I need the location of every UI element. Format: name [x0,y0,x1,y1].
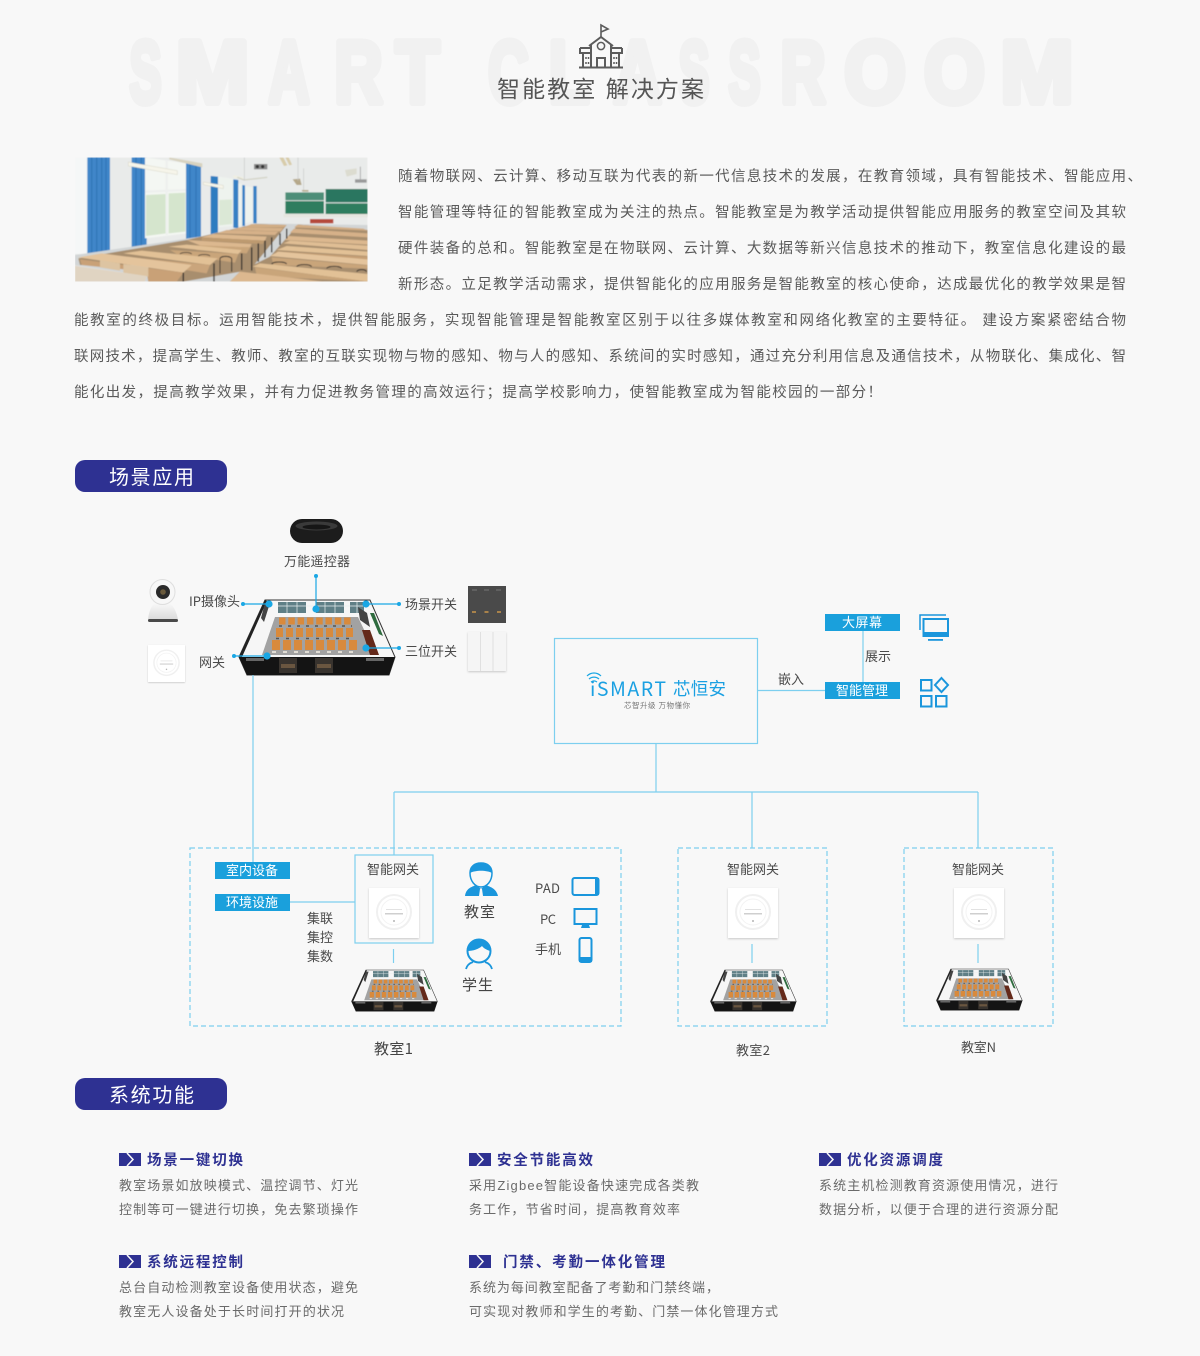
background watermark: SMART CLASSROOM: S [728,24,761,122]
label: 学生: 学生 [462,974,493,995]
title: 智能教室 解决方案 [497,76,704,102]
feature: 优化资源调度: 系统主机检测教育资源使用情况，进行 [819,1178,1058,1193]
tag: 环境设施 [215,892,290,911]
feature: 系统远程控制: 教室无人设备处于长时间打开的状况 [119,1304,344,1319]
heading: 场景应用 [75,460,227,492]
label: 教室2: 教室2 [736,1040,770,1059]
label: 三位开关: 三位开关 [405,641,457,660]
icon: IP camera [148,580,178,622]
label: 网关: 网关 [199,652,225,671]
feature: 系统远程控制 [119,1253,358,1319]
logo text: iSMART [590,673,666,702]
tag: 室内设备: 室内设备 [226,860,278,879]
tag: 大屏幕 [825,612,900,631]
feature: 场景一键切换 [119,1151,358,1217]
label: 场景开关: 场景开关 [405,594,457,613]
panel: 教室2 [678,848,827,1026]
connector: 嵌入 [757,669,825,690]
label: IP摄像头: IP摄像头 [189,591,240,610]
background watermark: SMART CLASSROOM: C [488,23,529,122]
feature: 门禁、考勤一体化管理 [469,1253,778,1319]
icon: school building [579,25,623,68]
connector: 展示: 展示 [865,646,891,665]
text: 集联 集控 集数: 集联 [307,908,333,927]
icon: phone [579,938,592,962]
icon: wifi logo mark [587,673,601,682]
background watermark: SMART CLASSROOM: M [1000,22,1074,122]
connector network [253,675,978,902]
text: 集联 集控 集数: 集控 [307,927,333,946]
intro paragraph: 硬件装备的总和。智能教室是在物联网、云计算、大数据等新兴信息技术的推动下，教室信息化建设的最 [398,239,1126,257]
icon: monitor [574,909,596,928]
background watermark: SMART CLASSROOM: M [176,22,249,122]
iSMART box [554,638,758,744]
background watermark: SMART CLASSROOM: O [844,23,906,121]
logo slogan: 芯智升级 万物懂你 [624,700,690,710]
device labels: PC [540,909,556,928]
feature: 优化资源调度 [819,1151,1058,1217]
heading: 场景应用: 场景应用 [109,466,194,489]
feature: 安全节能高效: 采用Zigbee智能设备快速完成各类教 [469,1178,699,1193]
logo text: 芯恒安 [673,676,726,701]
background watermark: SMART CLASSROOM: O [924,23,985,122]
label: 教室N: 教室N [961,1037,996,1056]
classroom model 1 [352,970,437,1011]
heading: 系统功能 [75,1078,227,1110]
background watermark: SMART CLASSROOM: A [613,23,662,122]
icon: tablet [572,878,599,895]
intro paragraph: 联网技术，提高学生、教师、教室的互联实现物与物的感知、物与人的感知、系统间的实时感知，通过充分利用信息及通信技术，从物联化、集成化、智 [74,348,1126,365]
device labels: PAD [535,878,560,897]
connector: 嵌入: 嵌入 [778,669,804,688]
tag: 环境设施: 环境设施 [226,892,278,911]
tag: 智能管理 [825,680,900,699]
background watermark: SMART CLASSROOM: L [549,23,589,122]
feature: 门禁、考勤一体化管理: 系统为每间教室配备了考勤和门禁终端， [469,1280,719,1295]
background watermark: SMART CLASSROOM: T [395,24,440,122]
feature: 优化资源调度: 数据分析，以便于合理的进行资源分配 [819,1202,1058,1217]
connector: 展示 [863,631,891,682]
intro paragraph: 随着物联网、云计算、移动互联为代表的新一代信息技术的发展，在教育领域，具有智能技术、智能应用、 [398,167,1142,185]
connector dots [232,574,401,660]
feature: 安全节能高效: 安全节能高效 [497,1151,594,1169]
feature: 系统远程控制: 总台自动检测教室设备使用状态，避免 [119,1280,358,1295]
feature: 场景一键切换: 场景一键切换 [147,1151,244,1169]
feature: 场景一键切换: 教室场景如放映模式、温控调节、灯光 [119,1178,358,1193]
tag: 室内设备 [215,860,290,879]
background watermark: SMART CLASSROOM: S [129,24,162,122]
logo text [590,673,726,702]
desk legs and chairs [180,229,367,282]
icon: universal remote [290,519,343,543]
icon: teacher [465,863,498,896]
tag: 大屏幕: 大屏幕 [842,612,882,631]
icon: student [466,939,492,969]
background watermark: SMART CLASSROOM: A [268,23,310,121]
gateway box [355,855,433,943]
text: 集联 集控 集数: 集数 [307,946,333,965]
background watermark: SMART CLASSROOM: S [678,23,710,121]
background watermark: SMART CLASSROOM: R [334,23,383,122]
icon: app grid [921,678,948,706]
left desk rows [75,224,287,282]
label: 教室1: 教室1 [374,1038,413,1059]
intro paragraph: 能化出发，提高教学效果，并有力促进教务管理的高效运行；提高学校影响力，使智能教室成为智能校园的一部分！ [74,384,882,401]
feature: 门禁、考勤一体化管理: 门禁、考勤一体化管理 [503,1253,666,1271]
icon: screens [920,615,949,641]
gateway box: 智能网关 [367,859,419,878]
feature: 门禁、考勤一体化管理: 可实现对教师和学生的考勤、门禁一体化管理方式 [469,1304,778,1319]
icon: dark scene switch [468,586,506,623]
panel: 教室N [904,848,1053,1026]
background watermark: SMART CLASSROOM: R [780,24,826,122]
intro paragraph: 新形态。立足教学活动需求，提供智能化的应用服务是智能教室的核心使命，达成最优化的教学效果是智 [398,275,1126,293]
device labels [535,878,561,958]
background watermark: SMART CLASSROOM [129,22,1074,122]
intro paragraph [74,167,1142,401]
photo: classroom [75,157,368,282]
icon: gateway panel [148,645,185,682]
label: 万能遥控器: 万能遥控器 [284,551,350,570]
heading: 系统功能: 系统功能 [109,1084,194,1107]
panel: 教室N: 智能网关 [952,859,1004,878]
classroom 3D model [239,600,395,675]
feature: 安全节能高效: 务工作，节省时间，提高教育效率 [469,1202,680,1217]
intro paragraph: 能教室的终极目标。运用智能技术，提供智能服务，实现智能管理是智能教室区别于以往多媒体教室和网络化教室的主要特征。 建设方案紧密结合物 [74,311,1126,329]
icon: white three-way switch [468,632,506,671]
feature: 优化资源调度: 优化资源调度 [847,1151,944,1169]
text: 集联 集控 集数 [307,908,333,965]
label: 教室: 教室 [464,901,495,922]
tag: 智能管理: 智能管理 [836,680,888,699]
feature: 系统远程控制: 系统远程控制 [147,1253,243,1271]
panel: 教室1 [190,848,621,1026]
right desk rows [230,225,368,282]
panel: 教室2: 智能网关 [727,859,779,878]
feature: 场景一键切换: 控制等可一键进行切换，免去繁琐操作 [119,1202,358,1217]
diagram: classroom device layout [148,519,506,682]
feature: 安全节能高效 [469,1151,699,1217]
intro paragraph: 智能管理等特征的智能教室成为关注的热点。智能教室是为教学活动提供智能应用服务的教室空间及其软 [398,203,1126,221]
device labels: 手机 [535,939,561,958]
